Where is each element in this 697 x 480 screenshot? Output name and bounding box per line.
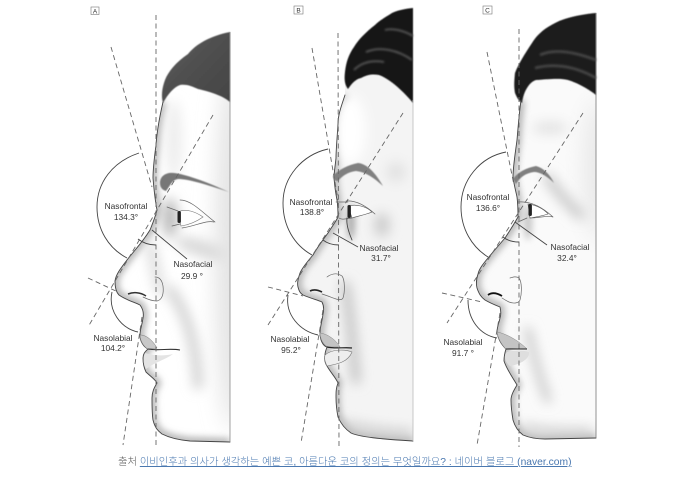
label B xyxy=(294,6,303,14)
label B: B xyxy=(296,8,301,14)
angle labels A: Nasofacial xyxy=(173,259,213,269)
source caption: 출처 이비인후과 의사가 생각하는 예쁜 코, 아름다운 코의 정의는 무엇일까요? : 네이버 블로그 (naver.com) xyxy=(118,457,572,468)
nose and mouth details B xyxy=(310,274,352,366)
angle labels B: Nasolabial xyxy=(270,334,310,344)
angle labels A: 29.9 ° xyxy=(181,271,203,281)
angle labels A: 134.3° xyxy=(114,212,138,222)
label A: A xyxy=(93,8,98,15)
profile outline A xyxy=(115,102,230,442)
angle labels A xyxy=(93,201,213,353)
eyebrow B xyxy=(333,163,383,186)
angle arcs B xyxy=(283,149,358,335)
right edge B xyxy=(412,100,414,441)
hair highlights B xyxy=(354,29,413,70)
angle labels B: Nasofacial xyxy=(359,243,399,253)
angle labels B: 31.7° xyxy=(371,253,391,263)
angle labels B: Nasofrontal xyxy=(290,197,333,207)
angle labels C: Nasolabial xyxy=(443,337,483,347)
angle guide lines B xyxy=(268,33,403,447)
profile outline B xyxy=(298,95,413,441)
nose and mouth details A xyxy=(128,277,180,369)
eyebrow C xyxy=(513,166,554,184)
nose and mouth details C xyxy=(488,277,529,366)
label C xyxy=(483,6,492,14)
hair A xyxy=(162,32,230,103)
face shading B xyxy=(298,75,412,440)
profile outline C xyxy=(476,100,596,439)
hair B xyxy=(345,8,413,103)
angle labels C: Nasofacial xyxy=(550,242,590,252)
angle labels C: 91.7 ° xyxy=(452,348,474,358)
right edge A xyxy=(229,32,231,442)
hair C xyxy=(514,13,596,103)
angle labels C: Nasofrontal xyxy=(467,192,510,202)
angle guide lines C xyxy=(442,29,583,447)
panel C: nasal angles profile xyxy=(442,6,612,450)
eye B xyxy=(336,201,375,240)
angle labels A: 104.2° xyxy=(101,343,125,353)
angle labels C: 32.4° xyxy=(557,253,577,263)
eyebrow A xyxy=(160,173,229,192)
angle guide lines A xyxy=(88,15,213,447)
label A xyxy=(91,7,99,15)
panel B: nasal angles profile xyxy=(268,6,420,450)
angle labels A: Nasofrontal xyxy=(105,201,148,211)
angle labels B: 95.2° xyxy=(281,345,301,355)
eye C xyxy=(518,202,553,222)
angle labels B: 138.8° xyxy=(300,207,324,217)
angle arcs C xyxy=(461,152,547,338)
label C: C xyxy=(485,8,490,14)
angle labels C xyxy=(443,192,590,358)
hair highlights C xyxy=(535,51,596,78)
angle labels A: Nasolabial xyxy=(93,333,133,343)
right edge C xyxy=(595,13,597,438)
angle labels B xyxy=(270,197,399,355)
face shading A xyxy=(116,96,230,442)
angle labels C: 136.6° xyxy=(476,203,500,213)
face shading C xyxy=(476,96,596,438)
angle arcs A xyxy=(97,153,187,332)
panel A: nasal angles profile xyxy=(88,6,231,446)
eye A xyxy=(167,200,215,228)
